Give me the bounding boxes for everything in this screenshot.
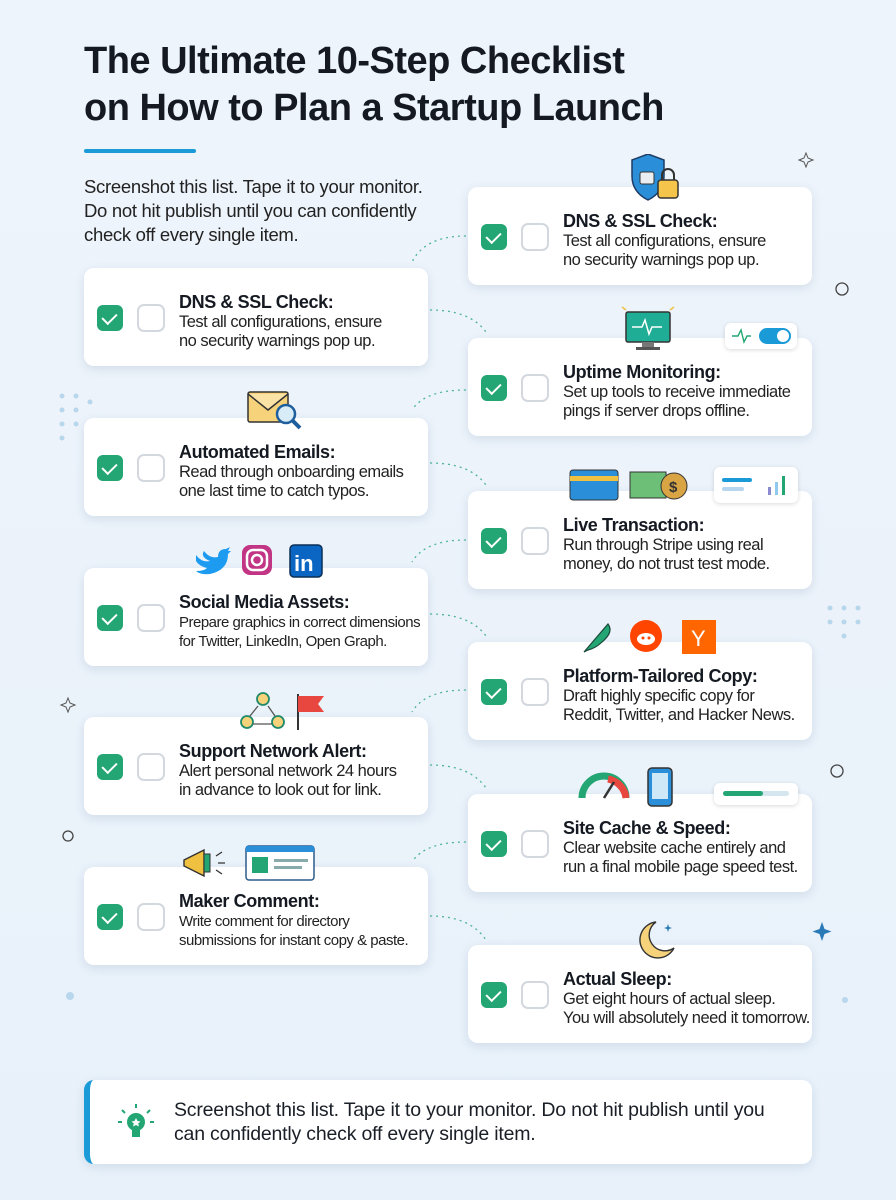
icon: social logos [196,544,323,578]
icon: megaphone and browser [183,845,315,881]
icon: credit card and cash [570,470,688,500]
card: Uptime Monitoring: Uptime Monitoring: [563,362,721,382]
card: Uptime Monitoring: Set up tools to receive immediate [563,383,790,401]
card: Automated Emails: Read through onboarding emails [179,463,403,481]
card: Actual Sleep: Get eight hours of actual sleep. [563,990,775,1008]
card: Live Transaction: Run through Stripe using real [563,536,763,554]
card: DNS & SSL (left): DNS & SSL Check: [179,292,333,312]
card: Site Cache & Speed: Clear website cache entirely and [563,839,785,857]
card: Automated Emails [84,418,428,516]
card: Social Media Assets: Prepare graphics in correct dimensions [179,614,420,631]
icon: feather, reddit, hn: Y [691,626,706,651]
icon: chart pill [714,467,798,503]
icon: social logos: in [294,551,314,576]
icon: toggle pill [725,323,797,349]
card: Site Cache & Speed: run a final mobile page speed test. [563,858,798,876]
card: Maker Comment [84,867,428,965]
card: DNS & SSL (left): Test all configurations, ensure [179,313,382,331]
card: Live Transaction [468,491,812,589]
card: Platform-Tailored Copy [468,642,812,740]
card: Site Cache & Speed [468,794,812,892]
card: Social Media Assets: for Twitter, LinkedIn, Open Graph. [179,633,387,650]
icon: shield lock [631,154,679,201]
card: DNS & SSL (left) [84,268,428,366]
card: Uptime Monitoring: pings if server drops offline. [563,402,749,420]
card: Automated Emails: Automated Emails: [179,442,335,462]
card: Support Network Alert: in advance to look out for link. [179,781,381,799]
card: Live Transaction: Live Transaction: [563,515,704,535]
intro text [84,176,423,245]
card: Support Network Alert: Alert personal network 24 hours [179,762,396,780]
card: Actual Sleep: You will absolutely need it tomorrow. [563,1009,810,1027]
title underline [84,149,196,153]
title: The Ultimate 10-Step Checklist [84,40,624,82]
card: Maker Comment: Write comment for directory [179,913,349,930]
callout: bottom tip [84,1080,812,1164]
card: Actual Sleep [468,945,812,1043]
card: Support Network Alert: Support Network Alert: [179,741,367,761]
card: Support Network Alert [84,717,428,815]
card: Maker Comment: submissions for instant copy & paste. [179,932,408,949]
card: Uptime Monitoring [468,338,812,436]
tip text [174,1099,765,1145]
card: DNS & SSL (left): no security warnings pop up. [179,332,375,350]
intro text: Screenshot this list. Tape it to your monitor. [84,176,423,197]
icon: envelope magnifier [247,391,302,430]
title: on How to Plan a Startup Launch [84,87,664,129]
title [84,40,664,129]
icon: lightbulb [118,1104,154,1137]
icon: network and flag [240,692,324,730]
intro text: check off every single item. [84,224,298,245]
card: Platform-Tailored Copy: Draft highly specific copy for [563,687,754,705]
card: Social Media Assets: Social Media Assets: [179,592,349,612]
card: Automated Emails: one last time to catch typos. [179,482,369,500]
icon: gauge and phone [578,767,673,807]
icon: moon [639,921,675,959]
card: Site Cache & Speed: Site Cache & Speed: [563,818,730,838]
card: DNS & SSL (right): no security warnings pop up. [563,251,759,269]
card: Actual Sleep: Actual Sleep: [563,969,672,989]
card: Live Transaction: money, do not trust test mode. [563,555,770,573]
card: DNS & SSL (right): DNS & SSL Check: [563,211,717,231]
intro text: Do not hit publish until you can confidently [84,200,416,221]
icon: progress pill [714,783,798,805]
card: Social Media Assets [84,568,428,666]
tip text: Screenshot this list. Tape it to your monitor. Do not hit publish until you [174,1099,765,1121]
icon: feather, reddit, hn [584,620,716,654]
icon: credit card and cash: $ [669,479,678,496]
tip text: can confidently check off every single item. [174,1123,536,1145]
card: Maker Comment: Maker Comment: [179,891,319,911]
card: DNS & SSL (right) [468,187,812,285]
card: Platform-Tailored Copy: Reddit, Twitter, and Hacker News. [563,706,795,724]
icon: monitor [622,306,674,350]
card: DNS & SSL (right): Test all configurations, ensure [563,232,766,250]
card: Platform-Tailored Copy: Platform-Tailored Copy: [563,666,757,686]
